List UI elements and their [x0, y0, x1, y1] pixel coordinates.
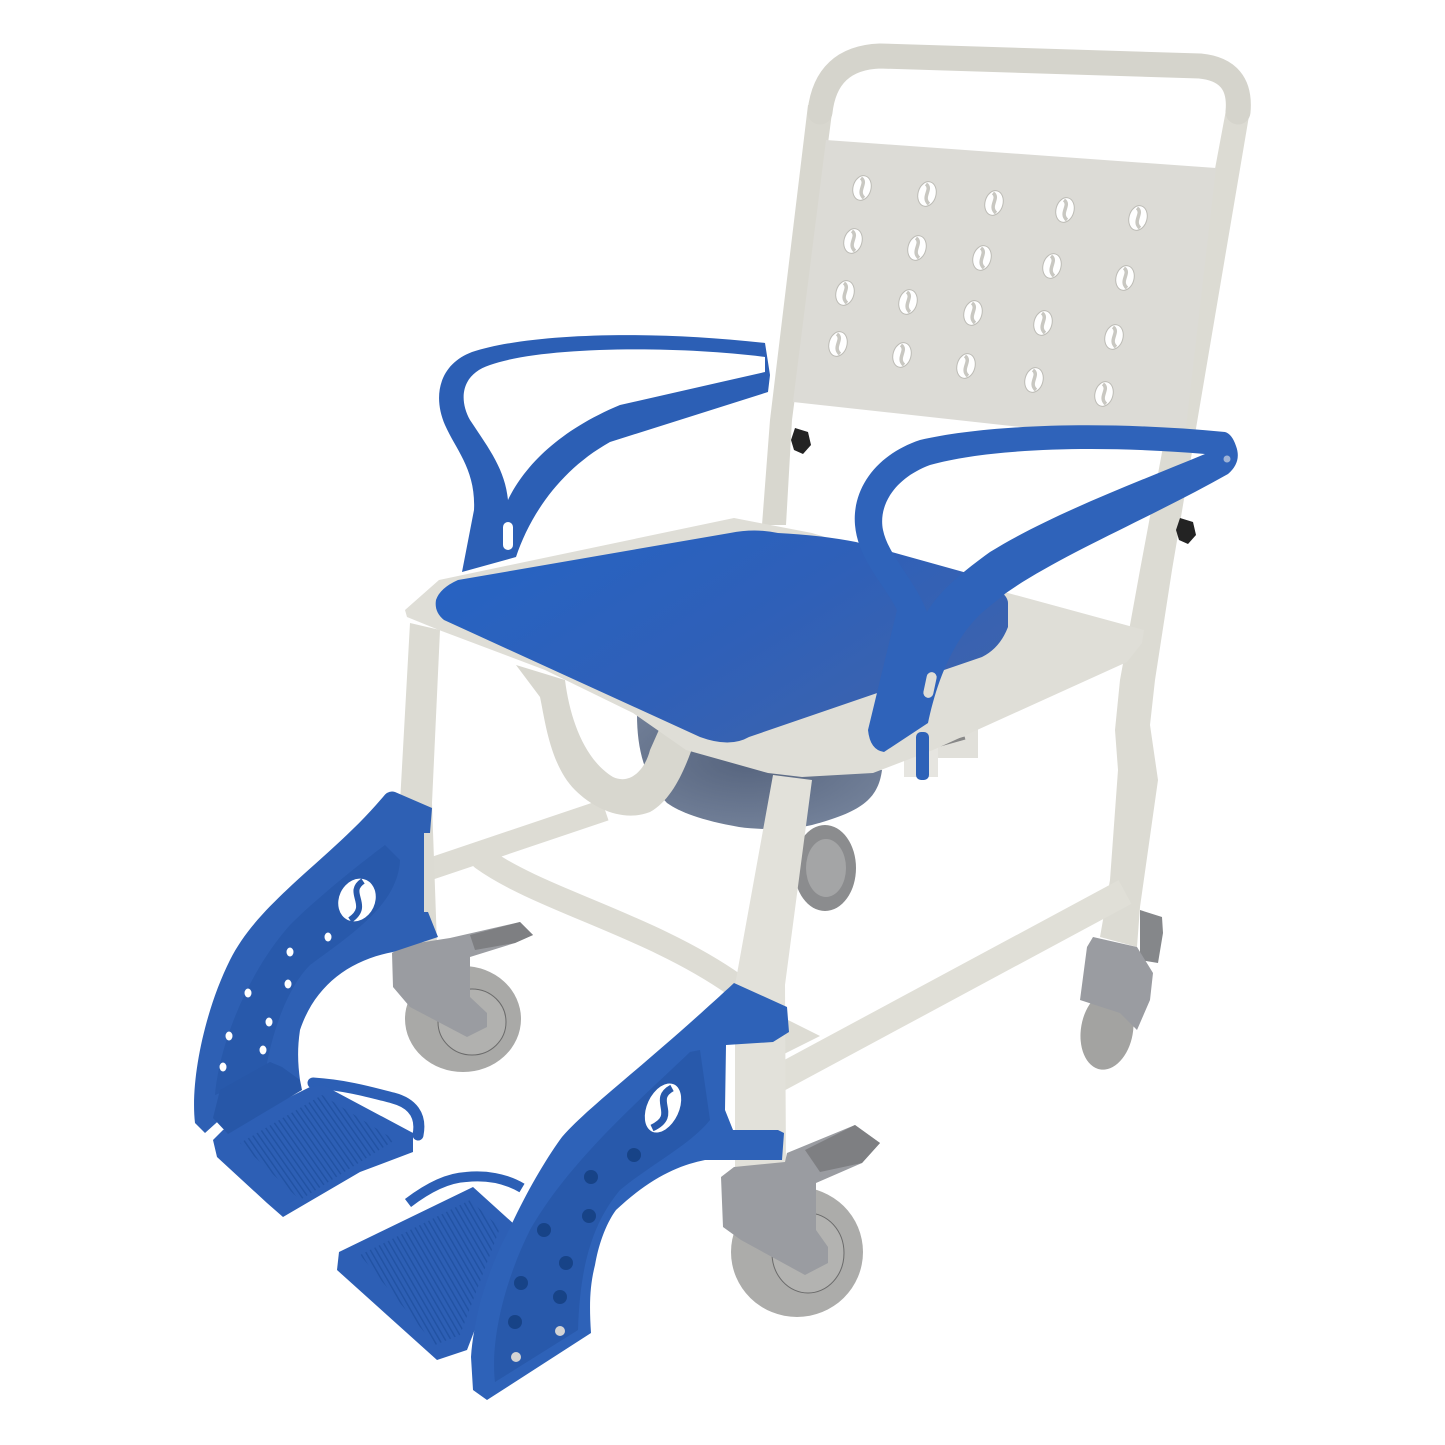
bracket recess [215, 845, 400, 1095]
left footplate [213, 1083, 419, 1217]
side bar [770, 892, 1125, 1083]
right footplate [337, 1176, 522, 1360]
backrest panel [793, 140, 1216, 445]
left front caster [392, 922, 533, 1072]
front left leg [400, 623, 440, 945]
footplate ribs [240, 1095, 395, 1200]
right armrest [855, 425, 1238, 752]
left armrest [439, 335, 770, 572]
bracket peg holes [220, 932, 332, 1072]
footplate hinge [213, 1062, 302, 1134]
bracket slot [638, 1078, 688, 1138]
armrest slot [922, 671, 938, 699]
footplate ribs [360, 1200, 500, 1345]
seat frame [405, 518, 1144, 777]
rear cross bar [430, 810, 605, 869]
top handle [820, 56, 1238, 112]
armrest slot [503, 522, 513, 550]
backrest ventilation holes [826, 174, 1150, 408]
right back post [1100, 110, 1250, 947]
bracket recess [494, 1050, 710, 1382]
commode bucket [637, 715, 882, 829]
curved lower cross bar [482, 858, 735, 985]
left footrest bracket [194, 792, 438, 1134]
seat latch plate [904, 722, 978, 777]
footplate strap [408, 1176, 522, 1203]
bracket peg holes [508, 1148, 641, 1329]
lower strut behind right leg [780, 1016, 820, 1056]
footplate strap [313, 1083, 419, 1135]
left back post [762, 105, 833, 525]
bracket slot [331, 872, 383, 928]
adjustment knob: right [1176, 518, 1196, 544]
right footrest bracket [471, 983, 789, 1400]
back frame [762, 56, 1250, 947]
caster brake pedal [470, 922, 533, 950]
caster brake pedal [805, 1125, 880, 1172]
seat cushion [436, 530, 1008, 742]
rear left wheel [794, 825, 856, 911]
right front caster [721, 1125, 880, 1317]
bracket rivets [511, 1326, 565, 1362]
rear right caster [1074, 910, 1163, 1074]
U-shaped support tube [516, 665, 695, 816]
armrest pivot [1224, 456, 1230, 462]
seat latch tab [916, 732, 929, 780]
adjustment knob: left [791, 428, 811, 454]
front right leg [735, 775, 812, 1167]
